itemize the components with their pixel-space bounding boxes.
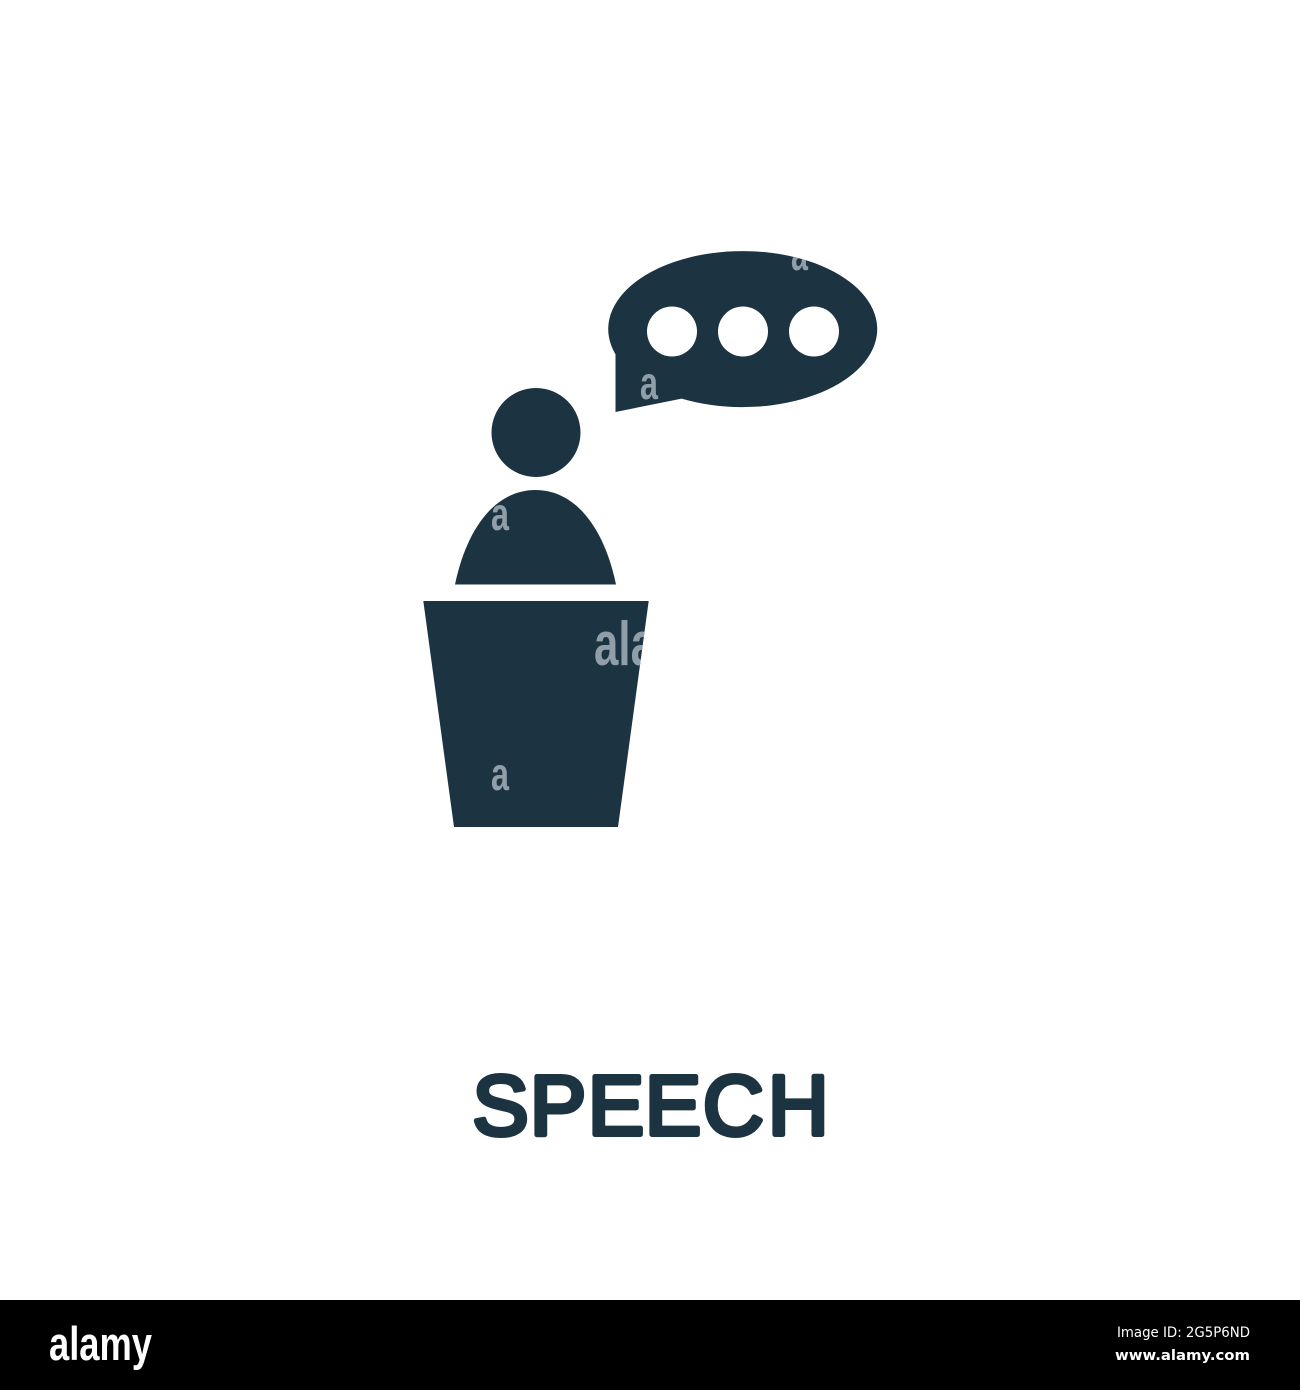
icon: speaker body [455,490,616,584]
image id: Image ID: 2G5P6ND [1117,1325,1250,1341]
icon: speech bubble [608,251,877,412]
watermark marks: a [791,228,808,280]
website: www.alamy.com [1115,1348,1250,1364]
watermark marks: ala [594,610,655,679]
watermark marks: a [640,357,658,409]
watermark marks [491,228,808,800]
title: SPEECH [472,1058,829,1152]
icon: podium [423,601,649,827]
logo wordmark: alamy [49,1317,152,1370]
watermark marks: a [491,748,509,800]
icon: speaker at podium with speech bubble [423,251,877,827]
watermark marks: a [491,488,509,540]
footer bar [0,1300,1300,1390]
icon: speaker head [492,388,580,477]
